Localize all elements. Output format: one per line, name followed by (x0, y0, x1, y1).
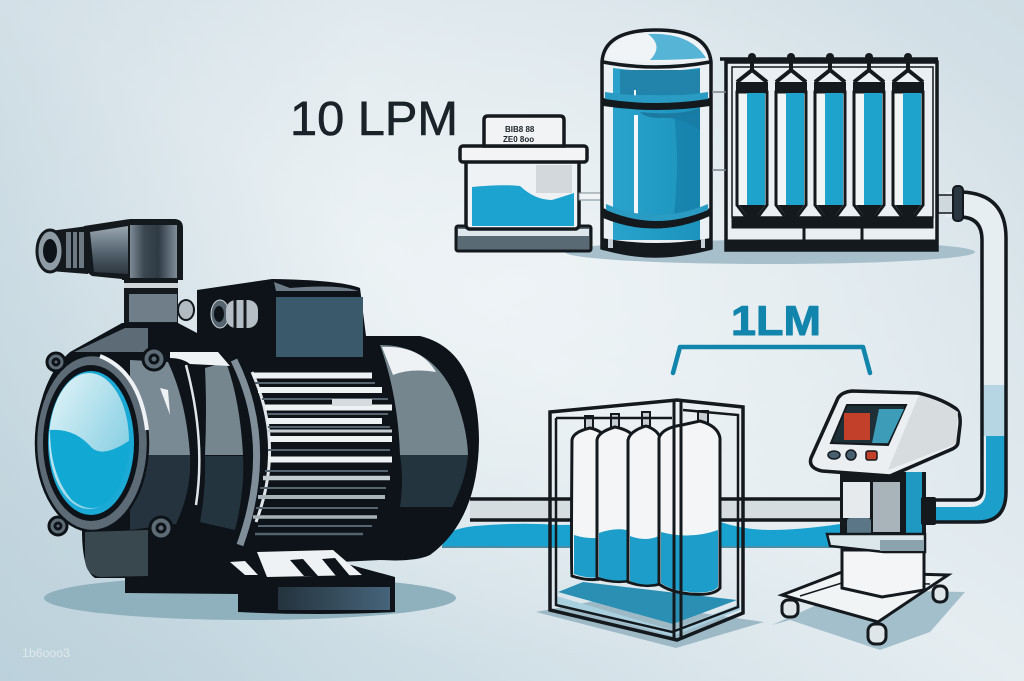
reservoir lid (460, 146, 587, 162)
storage tank (602, 30, 711, 256)
cylinder 1 (572, 416, 604, 580)
rear cover (380, 345, 468, 507)
front ring (36, 355, 148, 531)
cable gland (178, 300, 258, 328)
housing top (74, 328, 148, 352)
shadow: pump (44, 576, 456, 620)
shadow: top equipment (565, 240, 975, 264)
lower housing (85, 530, 148, 577)
floor tray (556, 582, 740, 636)
display screen (831, 405, 906, 445)
filter cartridge 2 (775, 53, 807, 217)
sight glass with water (48, 371, 134, 515)
reservoir label plate: BIB8 88 (505, 125, 535, 134)
cylinder 3 (628, 412, 660, 586)
tank base (602, 238, 711, 255)
bracket under 1LM (673, 347, 870, 373)
unit shadow (772, 590, 965, 650)
filter rack (712, 53, 938, 250)
foot plate (278, 587, 390, 610)
filter cartridge 1 (736, 53, 768, 217)
tank dome (606, 33, 708, 62)
reservoir label plate (484, 116, 564, 146)
pipe: horizontal line with water from pump to control unit (442, 499, 850, 547)
cluster shadow (536, 600, 764, 648)
reservoir label plate: ZE0 8oo (503, 135, 534, 144)
frame lines (550, 400, 743, 640)
connector (921, 497, 936, 525)
column (840, 472, 926, 540)
tank seam and bands (603, 62, 710, 67)
cooling fins (252, 372, 392, 534)
pump (36, 219, 479, 614)
cylinder 2 (597, 414, 635, 582)
rack frame (712, 59, 938, 250)
control unit (772, 391, 965, 650)
reservoir tub with water (466, 160, 579, 229)
reservoir base (456, 226, 591, 251)
filter cartridge 5 (892, 53, 924, 217)
flow label: 1LM: 1LM (731, 297, 821, 344)
buttons (828, 450, 877, 460)
tank cluster in glass frame (536, 400, 764, 648)
reservoir box (456, 116, 603, 251)
stub pipe (579, 193, 603, 200)
cabinet (842, 550, 924, 597)
body silhouette (36, 279, 479, 614)
pipe: riser from control unit to filter rack (928, 186, 1006, 522)
flange bolts (47, 348, 172, 539)
tank water (613, 68, 700, 240)
tank body (602, 30, 711, 256)
head (810, 391, 960, 476)
cart base and wheels (782, 572, 948, 644)
filter cartridge 3 (814, 53, 846, 217)
platform (827, 534, 925, 552)
outlet pipe and elbow (37, 219, 183, 328)
flow label: 10 LPM: 10 LPM (290, 93, 458, 146)
filter cartridge 4 (853, 53, 885, 217)
foot stripes (230, 550, 362, 577)
front bell housing (130, 360, 190, 530)
junction box face (274, 282, 363, 357)
watermark text: 1b6ooo3 (22, 648, 70, 660)
cylinder 4 (659, 411, 720, 594)
motor band (170, 352, 257, 545)
